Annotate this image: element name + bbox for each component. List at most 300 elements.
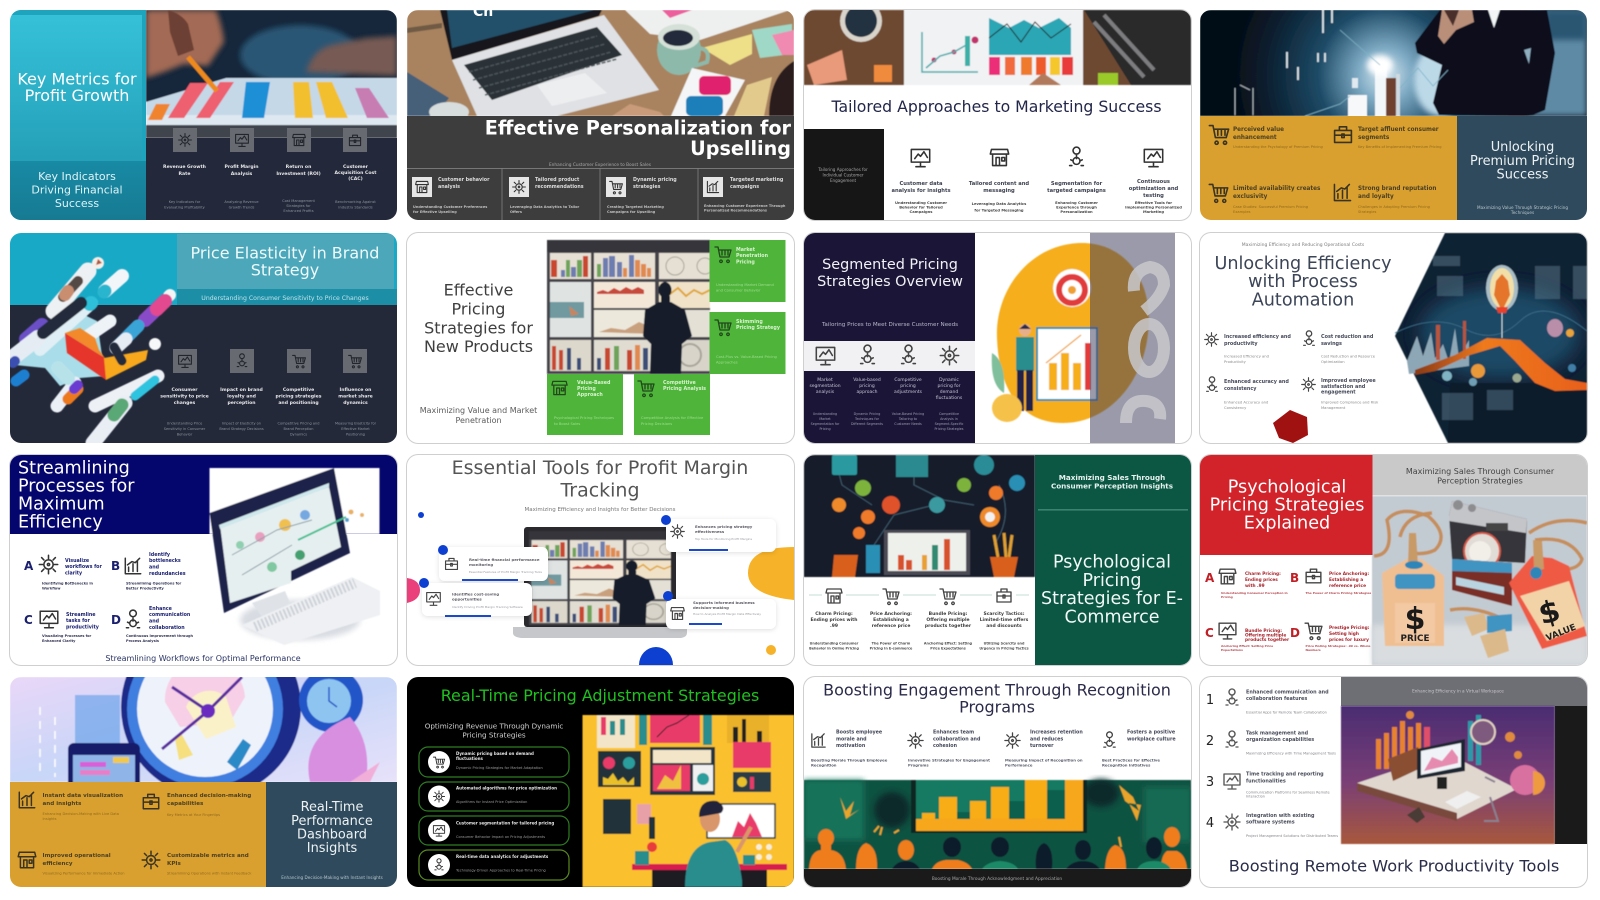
tactics row: Offering multiple <box>926 617 970 623</box>
gold panel: Perceived value <box>1233 127 1284 133</box>
strategy labels: Dynamic Pricing <box>854 412 880 416</box>
tactics row: Anchoring Effect: Setting <box>924 642 973 646</box>
abstract cube <box>65 328 148 380</box>
subtitle: Understanding Consumer Sensitivity to Price Changes <box>201 295 369 302</box>
benefits grid <box>1205 331 1379 410</box>
tactics row: Scarcity Tactics: <box>983 611 1025 617</box>
strategy tiles: Pricing <box>736 260 755 266</box>
title: Maximum <box>18 494 105 514</box>
green title panel: Pricing <box>1082 571 1142 591</box>
gold panel: Key Metrics at Your Fingertips <box>167 813 220 817</box>
strategy labels: approach <box>856 389 878 395</box>
benefits row <box>811 730 1176 768</box>
strategy labels: Analysis in <box>940 417 958 421</box>
card: cost saving: Identify Driving Profit Margin Tracking Software <box>452 605 523 609</box>
subtitle: Driving Financial <box>31 184 123 196</box>
item grid A–D: Offering multiple <box>1245 632 1286 638</box>
tag labels <box>1401 593 1578 644</box>
gold panel: Target affluent consumer <box>1358 127 1439 133</box>
item grid A–D: workflows for <box>65 564 102 570</box>
tag labels: PRICE <box>1401 634 1429 644</box>
item grid A–D: collaboration <box>149 625 185 631</box>
metrics row: Industry Standards <box>338 206 373 210</box>
panel: Effective Pricing Strategies for New Products <box>407 233 794 443</box>
red title block <box>1200 455 1372 555</box>
title: Tracking <box>559 480 640 502</box>
card: real-time monitoring: Essential Features of Profit Margin Tracking Tools <box>469 570 542 574</box>
benefits grid: savings <box>1321 341 1342 347</box>
benefits grid: consistency <box>1224 386 1257 392</box>
title panel <box>1457 116 1587 220</box>
red title block: Psychological <box>1228 478 1346 498</box>
factors row: sensitivity to price <box>160 394 209 400</box>
approaches row: Enhancing Customer <box>1055 201 1098 205</box>
strategy tiles: Approach <box>577 392 603 398</box>
red title block: Pricing Strategies <box>1210 496 1364 516</box>
benefits grid: Increased Efficiency and <box>1224 354 1269 358</box>
benefits grid: Cost Reduction and Resource <box>1321 354 1376 358</box>
benefits row: Recognition Initiatives <box>1102 762 1151 768</box>
item grid A–D <box>1205 569 1371 652</box>
item grid A–D: reference price <box>1329 583 1366 589</box>
item grid A–D: prices for luxury <box>1329 637 1369 643</box>
header band <box>1341 677 1587 706</box>
strategy labels: Segmentation for <box>811 422 840 426</box>
photo: desk with charts <box>804 0 1191 85</box>
benefits row: collaboration and <box>933 736 981 742</box>
card: pricing strategy: Top Tools for Monitoring Profit Margins <box>694 537 752 541</box>
item grid A–D: Streamlining Operations for <box>126 582 182 586</box>
numbered list: Essential Apps for Remote Team Collaboration <box>1246 710 1327 714</box>
title panel <box>266 782 397 887</box>
benefits row: Boosts employee <box>836 730 883 736</box>
strategy labels: Value-Based Pricing <box>892 412 924 416</box>
item grid A–D <box>24 552 193 643</box>
capsule 4: Technology-Driven Approaches to Real-Time Pricing <box>455 868 546 872</box>
photo: laptop on desk <box>407 10 794 122</box>
title panel: Real-Time <box>301 800 363 815</box>
title: Segmented Pricing <box>822 257 958 273</box>
metrics row: Analysis <box>231 171 253 177</box>
gold panel: Case Studies: Successful Premium Pricing <box>1233 205 1308 209</box>
subtitle: Maximizing Efficiency and Insights for Better Decisions <box>525 507 676 513</box>
panel: Tailored Approaches to Marketing Success <box>804 10 1191 220</box>
panel: Unlocking Premium Pricing Success <box>1200 10 1587 220</box>
gold panel: Strong brand reputation <box>1358 186 1436 192</box>
capsule 2 <box>419 782 569 811</box>
header band: Perception Strategies <box>1437 476 1523 486</box>
capsule 1: fluctuations <box>456 756 484 761</box>
caption bar <box>804 869 1191 887</box>
item grid A–D: Bundle Pricing: <box>1245 628 1282 634</box>
strategy labels: Competitive <box>939 412 959 416</box>
approaches row: Customer data <box>899 181 943 187</box>
benefits row: Boosting Morale Through Employee <box>811 758 888 762</box>
strategy labels <box>809 377 964 431</box>
item grid A–D: with .99 <box>1245 583 1265 589</box>
tactics row: Customer behavior <box>438 177 490 183</box>
strategy labels: adjustments <box>894 389 923 395</box>
tactics row: Dynamic pricing <box>633 177 677 183</box>
title: Effective <box>444 280 513 300</box>
tactics row: Pricing in E-commerce <box>870 646 913 650</box>
benefits grid: satisfaction and <box>1321 384 1366 390</box>
approaches row: testing <box>1143 193 1164 199</box>
item grid A–D: D <box>1290 626 1300 640</box>
tactics row: Offers <box>510 210 522 214</box>
gold panel: Challenges in Adopting Premium Pricing <box>1358 205 1430 209</box>
gold panel: Streamlining Operations with Instant Feedback <box>167 872 252 876</box>
item grid A–D: Numbers <box>1306 648 1321 652</box>
benefits grid: productivity <box>1224 341 1258 347</box>
strategy labels: Dynamic <box>939 377 959 383</box>
strategy labels: Competitive <box>894 377 922 383</box>
panel: Real-Time Performance Dashboard Insights <box>10 677 397 887</box>
gold panel: KPIs <box>167 861 182 867</box>
capsule 2: Algorithms for Instant Price Optimization <box>456 800 527 804</box>
tactics row: Price Anchoring: <box>870 611 912 617</box>
laptop with chart wall <box>513 527 687 638</box>
title panel: Premium Pricing <box>1470 154 1575 169</box>
strategy labels: Segment-Specific <box>935 422 964 426</box>
title: Unlocking Efficiency <box>1214 254 1392 274</box>
strategy tiles: Cost-Plus vs. Value-Based Pricing <box>716 355 777 359</box>
metrics row: Cost Management <box>282 199 315 203</box>
footer caption: Streamlining Workflows for Optimal Performance <box>105 654 301 663</box>
item grid A–D: Identifying Bottlenecks in <box>42 582 94 586</box>
strategy tiles: Psychological Pricing Techniques <box>554 416 614 420</box>
approaches row: Tailored content and <box>969 181 1029 187</box>
factors row: pricing strategies <box>276 394 322 400</box>
strategy tiles: Approaches <box>716 360 738 364</box>
title: Efficiency <box>18 512 103 532</box>
factors row: Measuring Elasticity for <box>335 422 377 426</box>
strategy labels: demand <box>940 389 958 395</box>
title panel: Unlocking <box>1491 140 1554 155</box>
item grid A–D: Identify <box>149 552 171 558</box>
photo: hand with pencil on chart <box>146 10 397 138</box>
item grid A–D: Establishing a <box>1329 577 1363 583</box>
approaches row: Campaigns <box>910 210 933 214</box>
capsule 1: Dynamic Pricing Strategies for Market Adaptation <box>456 766 543 770</box>
illustration: monitor and keyboard <box>210 468 380 645</box>
approaches row: Effective Tools for <box>1135 201 1172 205</box>
gold panel: exclusivity <box>1233 194 1268 200</box>
item grid A–D: products together <box>1245 637 1290 643</box>
benefits row: workplace culture <box>1127 736 1176 742</box>
item grid A–D: Workflow <box>42 586 61 590</box>
metrics row: Investment (ROI) <box>276 171 321 177</box>
item grid A–D: Process Analysis <box>126 639 159 643</box>
metrics row: Evaluating Profitability <box>164 206 206 210</box>
title: Strategies Overview <box>817 274 963 290</box>
metrics row: Enhanced Profits <box>283 209 314 213</box>
numbered list: 2 <box>1206 734 1214 749</box>
benefits row: Innovative Strategies for Engagement <box>908 758 990 762</box>
metrics row: Growth Trends <box>229 206 255 210</box>
strategy labels: fluctuations <box>936 395 963 401</box>
green title panel: Psychological <box>1053 552 1171 572</box>
tactics row: analysis <box>438 184 460 190</box>
item grid A–D: C <box>1205 626 1214 640</box>
gold panel: Examples <box>1233 210 1251 214</box>
strategy tiles <box>547 240 786 435</box>
subtitle: Key Indicators <box>38 170 116 183</box>
title: Upselling <box>690 137 791 160</box>
approaches row: Leveraging Data Analytics <box>972 202 1027 206</box>
numbered list: Time tracking and reporting <box>1246 772 1324 778</box>
strategy tiles: Penetration <box>736 253 769 259</box>
numbered list: Enhanced communication and <box>1246 690 1329 696</box>
item grid A–D: and <box>149 564 160 570</box>
item grid A–D: Prestige Pricing: <box>1329 625 1370 631</box>
approaches row: targeted campaigns <box>1047 188 1106 194</box>
tactics row: Utilizing Scarcity and <box>984 642 1025 646</box>
tactics row: Price Expectations <box>930 646 966 650</box>
numbered list: software systems <box>1246 820 1295 826</box>
title: Automation <box>1252 290 1354 310</box>
title panel: Maximizing Value Through Strategic Pricing <box>1477 205 1568 210</box>
tactics row: Ending prices with <box>810 617 858 623</box>
metrics row: Return on <box>286 164 311 170</box>
title panel: Enhancing Decision-Making with Instant Insights <box>281 875 383 880</box>
tactics row: Understanding Consumer <box>810 642 859 646</box>
approaches row: Implementing Personalized <box>1125 206 1182 210</box>
item grid A–D: Expectations <box>1221 648 1243 652</box>
approaches row: messaging <box>983 188 1015 194</box>
benefits grid: Enhanced accuracy and <box>1224 379 1289 385</box>
gold panel <box>10 782 266 887</box>
card: real-time monitoring <box>438 545 548 581</box>
title: Strategies for <box>424 318 533 338</box>
gold panel: and loyalty <box>1358 194 1394 200</box>
green title panel: Strategies for E- <box>1041 589 1183 609</box>
panel: Price Elasticity in Brand Strategy <box>10 233 397 443</box>
capsule 4 <box>419 850 569 880</box>
title panel: Techniques <box>1510 210 1534 215</box>
factors row: Consumer <box>172 387 198 393</box>
factors row: Brand Strategy Decisions <box>219 427 264 431</box>
benefits grid: Productivity <box>1224 360 1247 364</box>
factors row: Effective Market <box>341 427 370 431</box>
metrics row: Acquisition Cost <box>335 170 377 176</box>
item grid A–D: The Power of Charm Pricing Strategies <box>1306 591 1371 595</box>
strategy tiles: Skimming <box>736 319 763 325</box>
red title block: Explained <box>1244 514 1330 534</box>
tactics row: Establishing a <box>873 617 909 623</box>
capsule 2: Automated algorithms for price optimization <box>456 786 557 790</box>
approaches row: Behavior for Tailored <box>899 206 943 210</box>
approaches row <box>891 147 1182 214</box>
tactics row: The Power of Charm <box>872 642 911 646</box>
capsule 3: Consumer Behavior Impact on Pricing Adjustments <box>456 835 545 839</box>
strategy tiles: Market <box>736 247 756 253</box>
capsule 3 <box>419 816 569 845</box>
benefits grid: Improved Compliance and Risk <box>1321 400 1379 404</box>
item grid A–D: Pricing <box>1221 595 1233 599</box>
gold panel: Customizable metrics and <box>167 853 249 859</box>
tactics row: Campaigns for Upselling <box>607 210 656 214</box>
card: informed decisions: Supports informed business <box>693 600 755 605</box>
strategy labels: Customer Needs <box>894 422 922 426</box>
metrics row: Analyzing Revenue <box>224 200 259 204</box>
subtitle: Optimizing Revenue Through Dynamic <box>425 722 563 730</box>
tactics row: Targeted marketing <box>730 177 784 183</box>
benefits grid: Improved employee <box>1321 378 1376 384</box>
title panel: Strategy <box>251 260 319 280</box>
item grid A–D: Continuous Improvement through <box>126 634 193 638</box>
factors row: and positioning <box>278 400 319 406</box>
people <box>809 827 1187 869</box>
factors row: Competitive Pricing and <box>278 422 319 426</box>
item grid A–D: B <box>111 559 120 573</box>
title panel: Performance <box>291 814 373 829</box>
green title panel: Commerce <box>1064 608 1160 628</box>
tactics row: Leveraging Data Analytics to Tailor <box>510 205 579 209</box>
photo: man facing chart wall <box>547 240 713 374</box>
card: cost saving: Identifies cost-saving <box>452 592 499 596</box>
icon strip <box>804 341 975 371</box>
card: pricing strategy: effectiveness <box>695 529 725 534</box>
benefits grid: Enhanced Accuracy and <box>1224 400 1268 404</box>
item grid A–D: Ending prices <box>1245 577 1278 583</box>
green title panel <box>1035 455 1191 665</box>
tactics row: Tailored product <box>535 177 580 183</box>
title: Real-Time Pricing Adjustment Strategies <box>441 686 759 705</box>
factors row: Behavior <box>177 432 193 436</box>
gold panel: Insights <box>42 817 57 821</box>
title: Boosting Remote Work Productivity Tools <box>1229 856 1559 876</box>
card: informed decisions: decision-making <box>693 605 729 610</box>
photo: businessman and skyline <box>1200 10 1587 116</box>
panel: Psychological Pricing Strategies Explained <box>1200 455 1587 665</box>
tactics row: for Effective Upselling <box>413 210 457 214</box>
green title panel: Consumer Perception Insights <box>1051 482 1173 490</box>
numbered list: Maximizing Efficiency with Time Management Tools <box>1246 752 1336 756</box>
benefits row: Best Practices for Effective <box>1102 758 1160 762</box>
approaches row: for Targeted Messaging <box>974 208 1024 212</box>
tactics row: Limited-time offers <box>980 617 1029 623</box>
abstract diagonal pills <box>12 257 170 443</box>
illustration: light bulb and ribbon <box>1395 233 1587 443</box>
title panel: Price Elasticity in Brand <box>191 244 379 262</box>
metrics row <box>163 128 377 213</box>
factors row: Impact on brand <box>220 387 263 393</box>
item grid A–D: Streamline <box>66 612 96 618</box>
strategy labels: Tailoring to <box>898 417 917 421</box>
tactics row: Charm Pricing: <box>815 611 853 617</box>
tactics row: strategies <box>633 184 661 190</box>
card: cost saving <box>419 578 532 617</box>
strategy tiles: Competitive <box>663 380 697 386</box>
approaches row: analysis for insights <box>891 188 951 194</box>
title: Profit Growth <box>25 86 129 105</box>
gold panel: and insights <box>42 801 82 807</box>
strategy tiles: Value-Based <box>577 380 611 386</box>
item grid A–D: C <box>24 613 33 627</box>
strategy labels: Pricing Strategies <box>934 427 964 431</box>
tactics row: Urgency in Pricing Tactics <box>979 646 1029 650</box>
green title panel: Maximizing Sales Through <box>1059 473 1165 482</box>
gold panel: Improved operational <box>42 853 111 859</box>
benefits grid: Cost reduction and <box>1321 334 1374 340</box>
red hexagon <box>1273 410 1308 443</box>
approaches row: optimization and <box>1129 186 1179 192</box>
card: informed decisions: How to Analyze Profit Margin Data Effectively <box>693 612 761 616</box>
gold panel: capabilities <box>167 801 204 807</box>
card: real-time monitoring: Real-time financial performance <box>469 557 540 562</box>
item grid A–D: Understanding Consumer Perception in <box>1221 591 1288 595</box>
strategy labels: Techniques for <box>854 417 880 421</box>
photo: price tags and camera <box>1372 496 1587 665</box>
title: Programs <box>959 698 1035 716</box>
item grid A–D: Price Anchoring: <box>1329 571 1369 577</box>
tactics row: and discounts <box>986 623 1022 629</box>
panel: Boosting Engagement Through Recognition Programs <box>804 677 1191 887</box>
strategy tiles: Competitive Analysis for Effective <box>641 416 704 420</box>
strategy labels: analysis <box>816 389 835 395</box>
card: pricing strategy <box>661 515 776 552</box>
title: Effective Personalization for <box>485 116 791 140</box>
capsule 3: Customer segmentation for tailored pricing <box>456 820 554 826</box>
numbered list: Task management and <box>1246 730 1309 736</box>
translucent overlay with numerals <box>1090 233 1175 443</box>
item grid A–D: B <box>1290 571 1299 585</box>
numbered list: 4 <box>1206 816 1214 831</box>
capsule 1: Dynamic pricing based on demand <box>456 751 534 756</box>
item grid A–D: Visualize <box>65 558 90 564</box>
approaches row: Segmentation for <box>1051 181 1103 187</box>
item grid A–D: and <box>149 618 160 624</box>
card: pricing strategy: Enhances pricing strategy <box>695 524 753 529</box>
subtitle: Pricing Strategies <box>462 730 526 740</box>
tactics row: Understanding Customer Preferences <box>413 205 487 209</box>
panel: Real-Time Pricing Adjustment Strategies <box>407 677 794 887</box>
metrics row: Strategies for <box>286 204 311 208</box>
title panel: Insights <box>307 841 357 856</box>
factors row: changes <box>174 400 196 406</box>
subtitle: Enhancing Customer Experience to Boost Sales <box>549 162 652 168</box>
benefits grid: Increased efficiency and <box>1224 334 1291 340</box>
item grid A–D: D <box>111 613 121 627</box>
title: Essential Tools for Profit Margin <box>452 457 748 479</box>
factors row: Sensitivity in Consumer <box>164 427 206 431</box>
panel: Unlocking Efficiency with Process Automation <box>1200 233 1587 443</box>
numbered list: Integration with existing <box>1246 813 1315 819</box>
card: cost saving: opportunities <box>452 596 482 602</box>
subtitle: Success <box>55 197 99 210</box>
card: real-time monitoring: monitoring <box>469 562 493 567</box>
numbered list: collaboration features <box>1246 696 1307 702</box>
card: informed decisions <box>663 591 776 629</box>
factors row: dynamics <box>343 400 368 406</box>
item grid A–D: Enhanced Clarity <box>42 639 76 643</box>
gold panel: enhancement <box>1233 135 1277 141</box>
factors row: market share <box>338 394 373 400</box>
illustration: isometric desk <box>1341 706 1555 844</box>
tactics row: .99 <box>830 623 838 629</box>
illustration: clock and phone <box>10 617 397 797</box>
item grid A–D: bottlenecks <box>149 558 181 564</box>
benefits row: turnover <box>1030 743 1054 749</box>
title: with Process <box>1248 272 1358 292</box>
item grid A–D: Charm Pricing: <box>1245 571 1281 577</box>
strategy labels: Understanding <box>813 412 837 416</box>
strategy labels: pricing for <box>937 383 961 389</box>
numbered list: 1 <box>1206 693 1214 708</box>
factors row: Dynamics <box>290 432 307 436</box>
benefits row: morale and <box>836 736 867 742</box>
